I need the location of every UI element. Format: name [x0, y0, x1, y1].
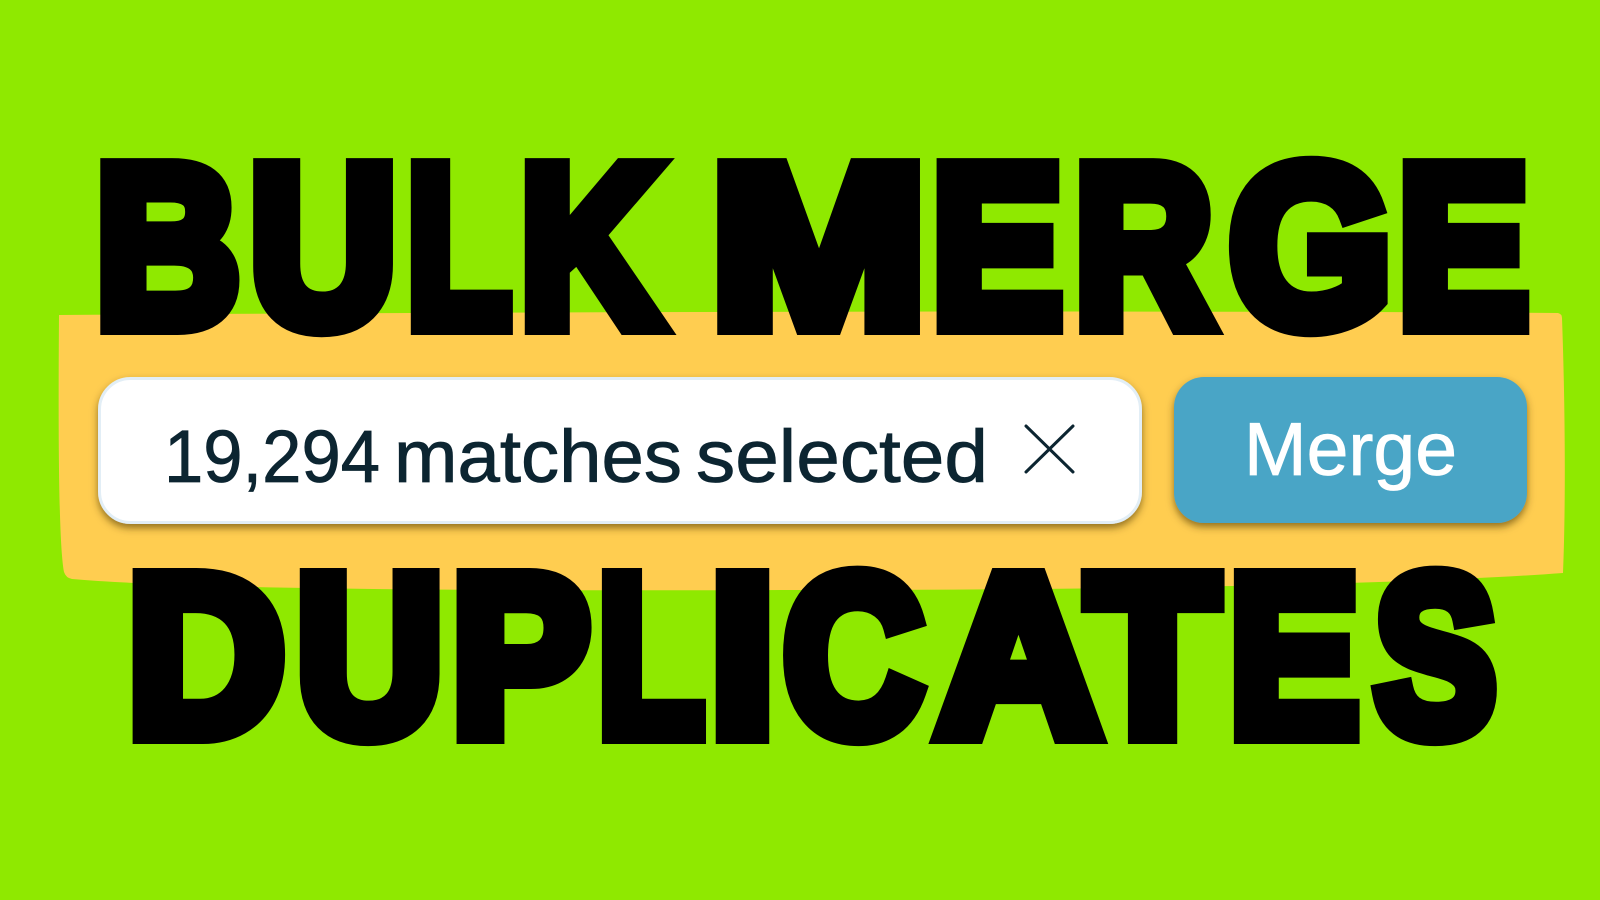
heading: DUPLICATES: [128, 528, 1496, 783]
heading: DUPLICATES: L: [598, 528, 704, 782]
heading: BULK MERGE: K: [520, 118, 661, 373]
heading: BULK MERGE: G: [1230, 119, 1391, 374]
heading: DUPLICATES: A: [937, 529, 1100, 782]
heading: DUPLICATES: E: [1229, 529, 1359, 782]
selection bar background: [100, 378, 1140, 522]
heading: BULK MERGE: B: [96, 120, 240, 374]
heading: BULK MERGE: M: [711, 119, 926, 374]
heading: BULK MERGE: E: [1398, 119, 1528, 373]
heading: BULK MERGE: R: [1075, 119, 1213, 374]
button background: [1174, 377, 1527, 523]
icon: close X: [1026, 426, 1073, 472]
heading: DUPLICATES: C: [784, 528, 923, 782]
text: 19,294 matches selected: [164, 415, 988, 498]
text: 19,294 matches selected: matches: [394, 415, 682, 498]
heading: BULK MERGE: L: [407, 119, 511, 374]
button label: Merge: [1244, 407, 1457, 491]
selection bar: matches selected: [100, 378, 1140, 522]
heading: DUPLICATES: U: [296, 528, 443, 782]
heading: DUPLICATES: D: [128, 530, 285, 783]
heading: DUPLICATES: T: [1088, 529, 1218, 782]
heading: BULK MERGE: [96, 118, 1528, 374]
panel: orange highlight blob: [59, 312, 1565, 590]
heading: BULK MERGE: U: [250, 119, 396, 374]
text: 19,294 matches selected: 19,294: [164, 415, 380, 498]
heading: BULK MERGE: E: [932, 119, 1062, 373]
heading: DUPLICATES: S: [1375, 529, 1496, 783]
text: 19,294 matches selected: selected: [696, 415, 988, 498]
heading: DUPLICATES: P: [452, 529, 590, 782]
button: Merge: [1174, 377, 1527, 523]
heading: DUPLICATES: I: [710, 529, 775, 783]
